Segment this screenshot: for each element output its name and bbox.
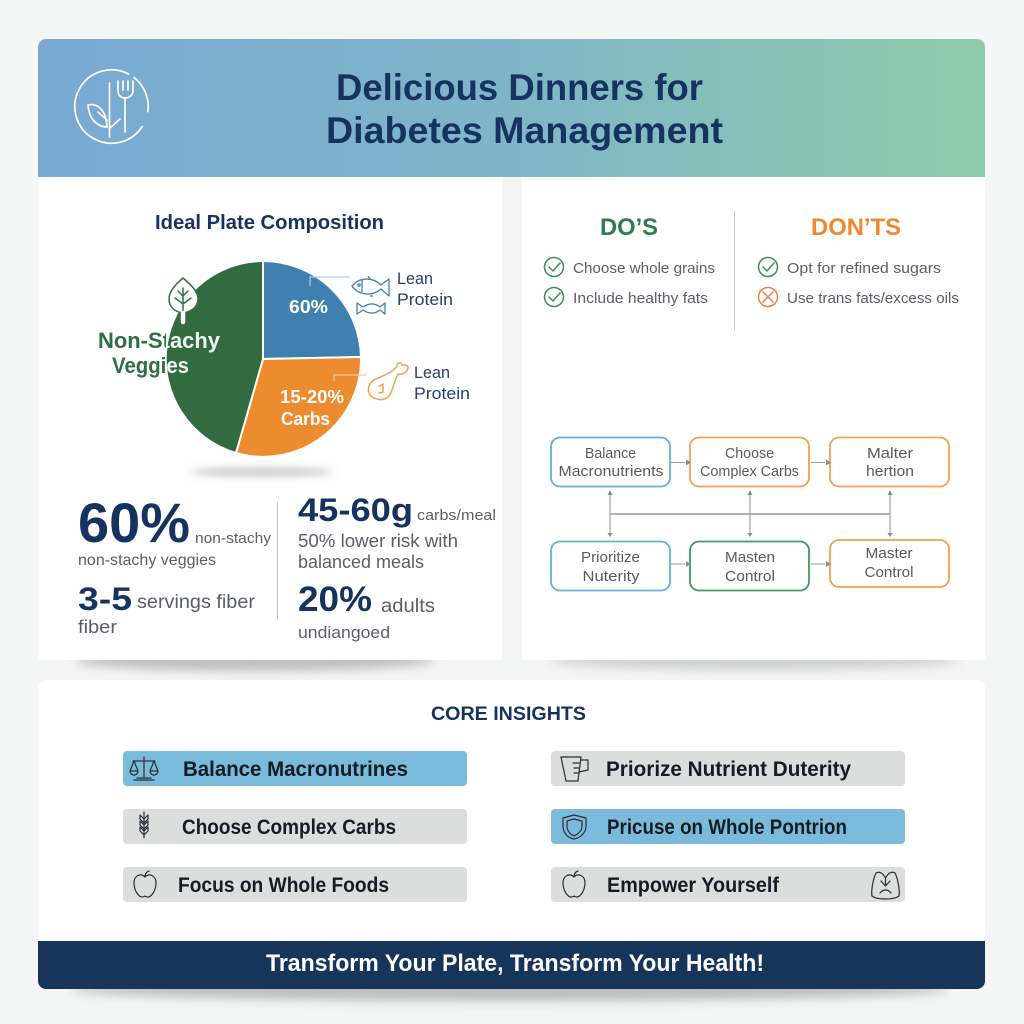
icon: wheat [140,812,148,838]
icon: scale [130,757,158,780]
icon: chicken leg [368,363,408,400]
flow diagram: Prioritize [581,549,640,566]
flow diagram: Malter [867,445,913,462]
label: non-starchy veggies [98,328,221,378]
heading: don'ts: DON’TS [811,214,901,241]
callout lines [310,277,366,381]
flow diagram: Nuterity [582,568,640,585]
label: lean protein 2: Protein [414,385,470,403]
panel: plate composition [38,177,502,660]
heading: ideal plate: Ideal Plate Composition [155,212,384,234]
label: lean protein 1: Protein [397,291,453,309]
label: lean protein 1: Lean [397,270,433,288]
flow diagram: Macronutrients [558,463,664,480]
icon: fish [352,276,389,314]
flow diagram: Control [725,568,775,585]
header banner [38,39,985,177]
icon: plant and fork logo [75,70,148,143]
heading: core insights: CORE INSIGHTS [431,704,586,725]
pill labels: Balance Macronutrines [183,758,408,781]
label: non-starchy veggies: Non-Stachy [98,328,221,353]
panel: core insights [38,680,985,941]
stat: 60% veggies: non-stachy veggies [78,552,216,569]
title: Delicious Dinners for [336,67,703,108]
pie labels: 15-20% [280,387,344,407]
stat: 45-60g carbs: balanced meals [298,552,424,572]
title: Diabetes Management [326,110,723,151]
stat: 45-60g carbs: carbs/meal [417,507,496,524]
stat: 60% veggies: 60% [78,491,190,554]
stat: 45-60g carbs [298,492,496,572]
pill labels: Focus on Whole Foods [178,874,389,897]
label: lean protein 2 [414,364,470,403]
list items: Include healthy fats [573,290,708,307]
flow diagram: Balance [585,445,636,462]
stat: 20% adults [298,580,435,642]
stat: 20% adults: undiangoed [298,623,390,642]
list items: Use trans fats/excess oils [787,290,959,307]
flow diagram: Choose [725,445,774,462]
flow diagram: Control [864,564,914,581]
flow diagram: Complex Carbs [700,463,799,480]
pill labels: Empower Yourself [607,874,780,897]
pill icons [130,757,899,899]
flow diagram: Master [866,545,913,562]
panel: do's and don'ts with flow [522,177,985,660]
stat: 3-5 servings: 3-5 [78,581,132,617]
flow diagram: Masten [725,549,775,566]
label: lean protein 2: Lean [414,364,450,382]
list items: Choose whole grains [573,260,715,277]
icon: apple right [563,871,585,897]
stat: 45-60g carbs: 50% lower risk with [298,531,458,551]
icon: lungs [872,872,899,899]
pie labels [280,297,344,429]
panel shadows [70,649,960,1001]
label: non-starchy veggies: Veggies [112,353,189,378]
title [326,67,723,151]
pie labels: 60% [289,297,328,317]
stat: 20% adults: adults [381,596,435,617]
pie shadow [190,468,334,476]
label: lean protein 1 [397,270,453,309]
footer banner: Transform Your Plate, Transform Your Health! [266,950,764,977]
pill labels [178,758,851,897]
list items: Opt for refined sugars [787,260,941,277]
icon: shield [563,815,586,839]
stat: 3-5 servings: fiber [78,617,117,637]
pill labels: Choose Complex Carbs [182,816,396,839]
stat: 45-60g carbs: 45-60g [298,492,413,528]
flow diagram [551,438,949,590]
pie labels: Carbs [281,409,330,429]
icons: checks and cross [544,258,778,306]
flow diagram: hertion [866,463,914,480]
list items [573,260,959,307]
stat: 20% adults: 20% [298,580,372,619]
pie chart [166,261,361,457]
stat: 60% veggies: non-stachy [195,530,272,547]
stat: 3-5 servings: servings fiber [137,592,256,613]
icon: apple left [134,871,156,897]
icon: measuring cup [561,757,588,781]
pill labels: Priorize Nutrient Duterity [606,758,851,781]
footer banner [38,941,985,989]
pill backgrounds [123,751,905,902]
stat: 60% veggies [78,491,272,569]
stat: 3-5 servings [78,581,256,637]
pill labels: Pricuse on Whole Pontrion [607,816,847,839]
heading: do's: DO’S [600,214,658,241]
icon: leaf [169,278,198,322]
